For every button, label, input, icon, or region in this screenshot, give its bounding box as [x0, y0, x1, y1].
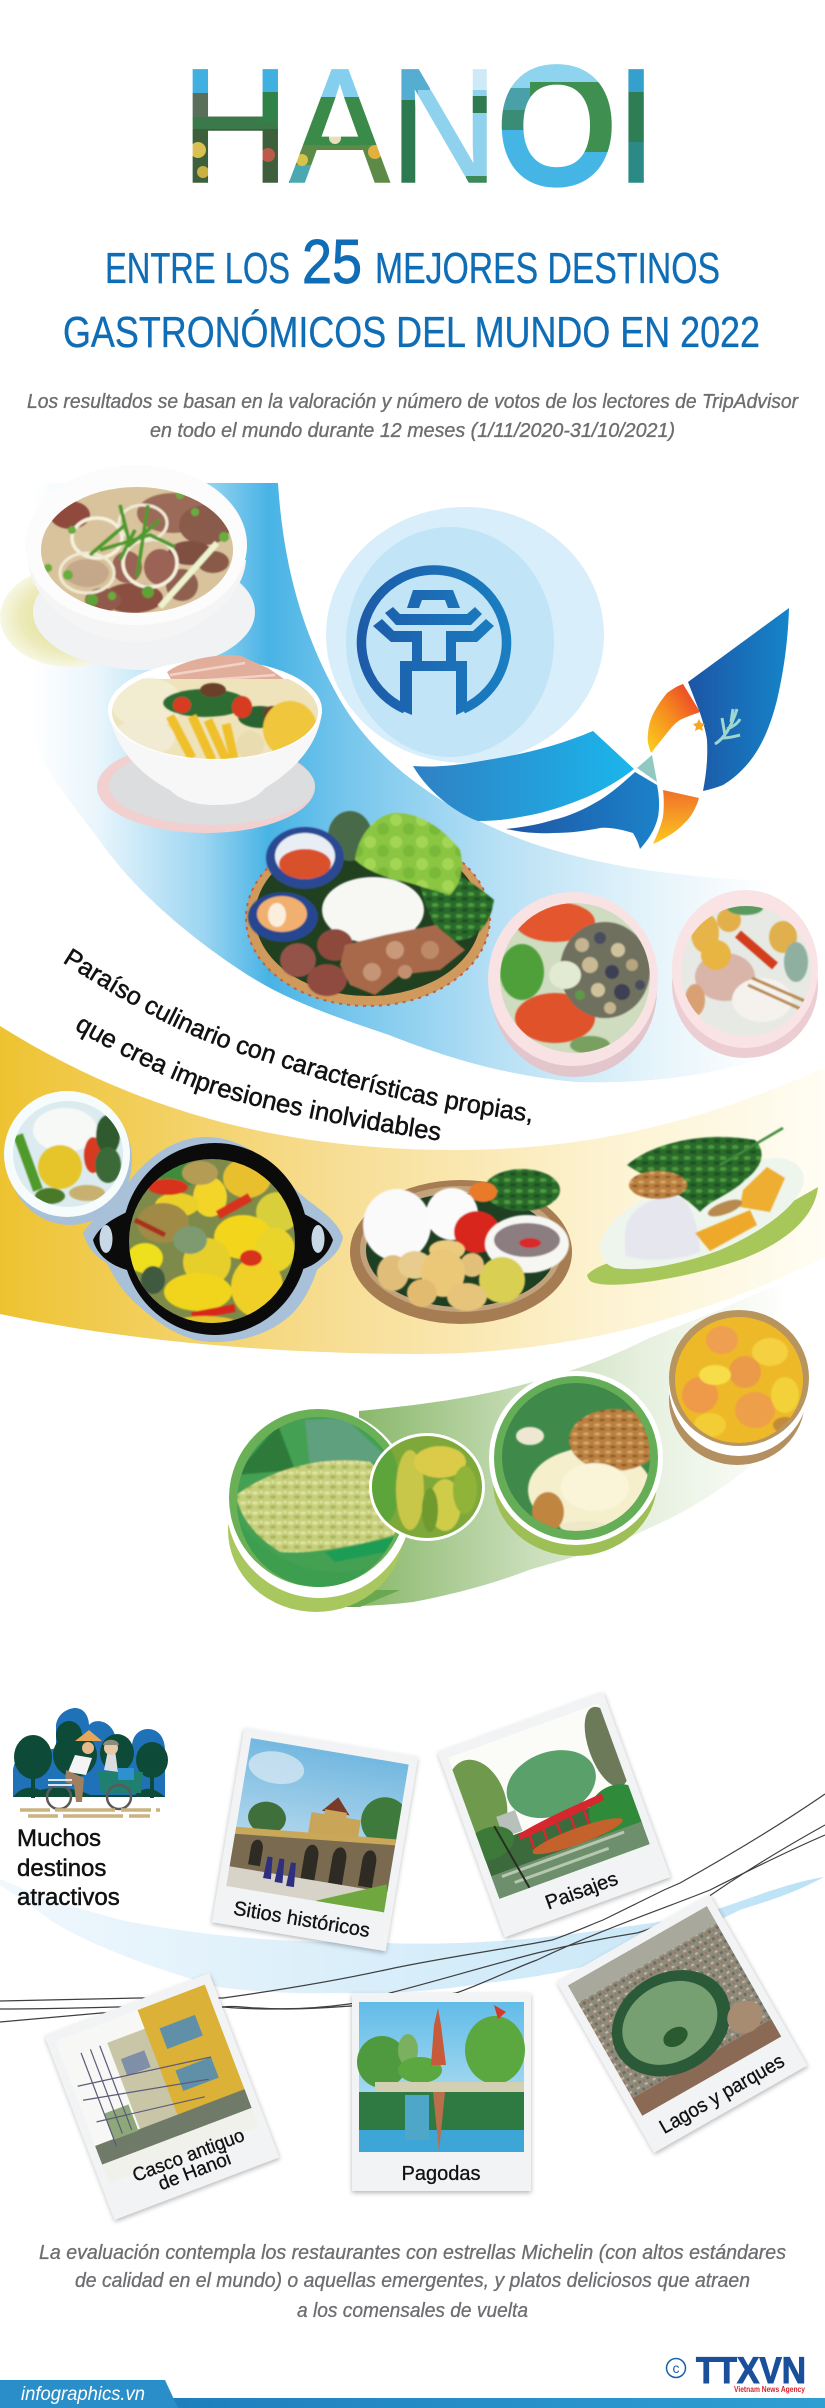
photo card: pagodas: Pagodas — [402, 2163, 480, 2185]
intro text: Los resultados se basan en la valoración y número de votos de los lectores de TripAdvisor — [27, 391, 799, 413]
logo: dove — [413, 608, 789, 849]
tagline: curved text: Paraíso culinario con características propias, — [64, 948, 531, 1126]
photo card: pagodas — [352, 1993, 531, 2191]
wires — [0, 1794, 825, 2022]
photo card: historic sites: Sitios históricos — [232, 1898, 372, 1942]
heading: many attractive destinations: atractivos — [17, 1884, 120, 1911]
heading: gastronomic destinations: 25 — [302, 228, 362, 297]
food: snail noodle bowl — [488, 892, 658, 1077]
heading: gastronomic destinations: ENTRE LOS — [105, 244, 290, 293]
heading: many attractive destinations — [17, 1825, 120, 1911]
food: mixed noodle bowl — [672, 890, 818, 1058]
photo card: old quarter: Casco antiguo — [130, 2125, 248, 2187]
intro text — [27, 391, 799, 442]
food: cha ca pan — [83, 1137, 343, 1342]
intro text: en todo el mundo durante 12 meses (1/11/2020-31/10/2021) — [150, 420, 675, 442]
photo card: landscapes — [431, 1691, 674, 1940]
logo: TTXVN — [666, 2350, 806, 2394]
food: shrimp cake bowl — [669, 1310, 809, 1465]
heading: many attractive destinations: Muchos — [17, 1825, 101, 1852]
closing text: La evaluación contempla los restaurantes con estrellas Michelin (con altos estándares — [39, 2242, 786, 2264]
logo: TTXVN: c — [672, 2360, 680, 2376]
footer bar — [0, 2380, 825, 2408]
photo card: landscapes: Paisajes — [542, 1868, 621, 1914]
heading: many attractive destinations: destinos — [17, 1855, 106, 1882]
food: small fish noodle bowl — [4, 1091, 132, 1225]
tagline: curved text: que crea impresiones inolvidables — [76, 1019, 440, 1140]
title: HANOI photo lettering: HANOI — [181, 34, 657, 217]
panel: yellow curved band — [0, 1026, 825, 1354]
photo card: lakes and parks — [557, 1894, 807, 2153]
photo card: historic sites — [212, 1728, 420, 1952]
icon: cyclo with trees — [13, 1708, 168, 1816]
photo card: old quarter — [45, 1973, 279, 2220]
decorative wave — [0, 1877, 824, 1993]
closing text: de calidad en el mundo) o aquellas emergentes, y platos deliciosos que atraen — [75, 2270, 750, 2292]
photo card: lakes and parks: Lagos y parques — [656, 2050, 788, 2139]
band corner — [315, 1590, 400, 1607]
heading: gastronomic destinations — [63, 228, 760, 357]
food: pho bowl — [0, 465, 255, 670]
photo card: old quarter: de Hanoi — [155, 2148, 234, 2195]
food: bun dau basket — [350, 1169, 572, 1324]
food: green rice bowl — [226, 1408, 485, 1612]
food: bun thang bowl — [97, 655, 322, 833]
closing text — [39, 2242, 786, 2322]
heading: gastronomic destinations: MEJORES DESTINOS — [375, 244, 720, 293]
panel: blue curved band — [25, 483, 825, 1082]
food: bun cha tray — [246, 811, 494, 1006]
food: banh cuon plate — [587, 1128, 818, 1285]
closing text: a los comensales de vuelta — [297, 2300, 528, 2322]
logo: TTXVN: Vietnam News Agency — [734, 2385, 805, 2394]
food: xoi sticky rice bowl — [489, 1371, 663, 1556]
footer bar: infographics.vn — [21, 2384, 145, 2405]
logo: TTXVN: TTXVN — [696, 2350, 806, 2391]
panel: green curved band — [315, 1268, 825, 1607]
logo: Hanoi emblem — [326, 507, 604, 763]
